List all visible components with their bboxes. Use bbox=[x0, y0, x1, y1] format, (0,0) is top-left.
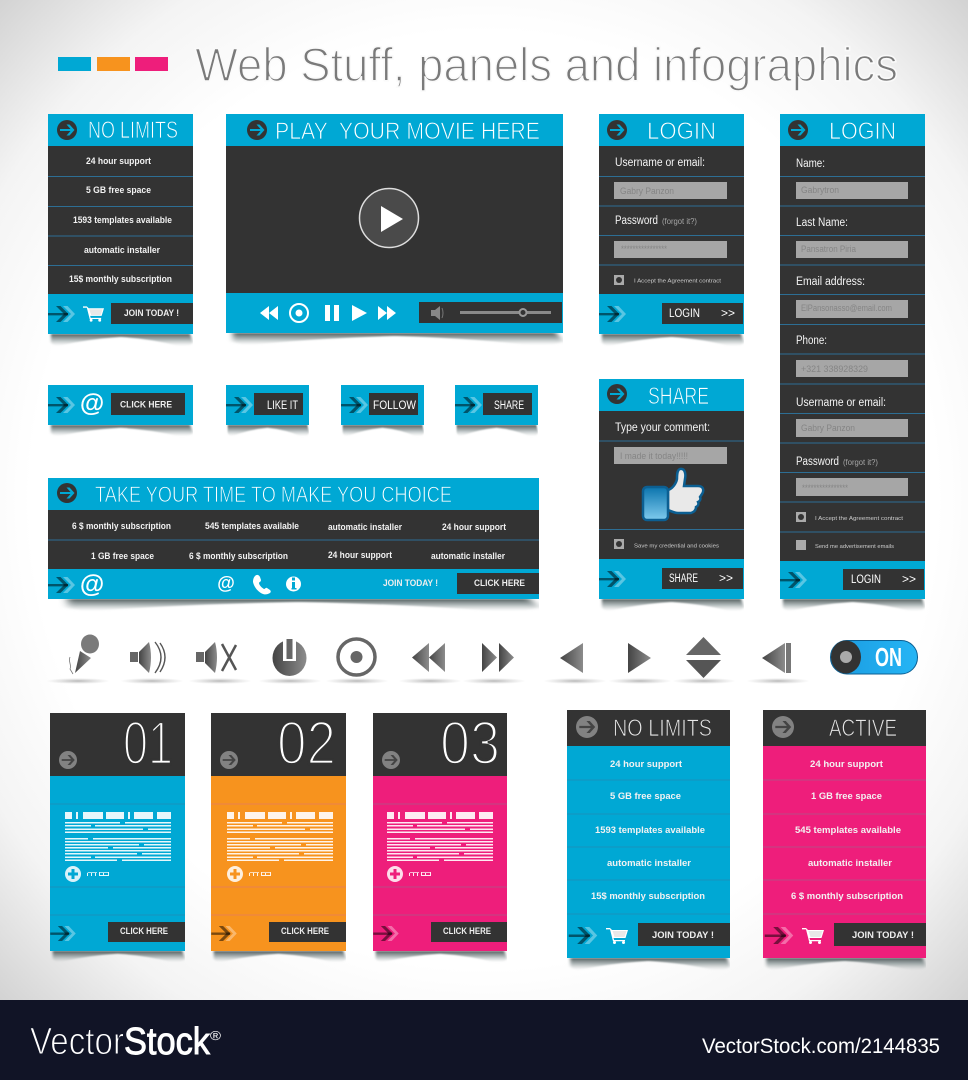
button: login: >> bbox=[902, 574, 916, 586]
placeholder copy bbox=[65, 812, 171, 882]
panel: registration bbox=[780, 114, 925, 611]
heading: TAKE YOUR TIME TO MAKE YOU CHOICE bbox=[95, 482, 452, 507]
card 03 bbox=[373, 709, 507, 962]
feature rows: automatic installer bbox=[808, 858, 893, 868]
feature rows: 6 $ monthly subscription bbox=[189, 551, 288, 561]
icon: next bbox=[628, 643, 651, 673]
form fields: Phone: bbox=[796, 335, 827, 347]
button: CLICK HERE bbox=[120, 926, 168, 936]
feature rows: 545 templates available bbox=[205, 521, 299, 531]
form fields: Username or email: bbox=[796, 397, 886, 409]
username: Username or email: bbox=[615, 157, 705, 169]
feature rows: 24 hour support bbox=[328, 550, 392, 560]
logo: Vector bbox=[30, 1021, 124, 1063]
call to action text: JOIN TODAY ! bbox=[383, 578, 438, 588]
button: login bbox=[843, 569, 924, 590]
button: CLICK HERE bbox=[443, 926, 491, 936]
icon: play button bbox=[360, 188, 418, 248]
form fields bbox=[796, 158, 908, 496]
form fields: Password bbox=[796, 456, 839, 468]
panel: active pink plan bbox=[763, 710, 926, 970]
button: join today: JOIN TODAY ! bbox=[652, 930, 714, 940]
button: join today bbox=[834, 923, 926, 946]
icon: back to start bbox=[762, 643, 791, 673]
feature rows: 15$ monthly subscription bbox=[69, 274, 172, 284]
cookies checkbox: Save my credential and cookies bbox=[634, 544, 719, 550]
agreement checkbox: I Accept the Agreement contract bbox=[634, 278, 722, 284]
button: like it bbox=[226, 385, 309, 436]
image url: VectorStock.com/2144835 bbox=[702, 1035, 940, 1058]
button: share bbox=[662, 568, 743, 589]
feature rows: 15$ monthly subscription bbox=[591, 891, 705, 901]
heading: LOGIN bbox=[829, 118, 896, 145]
icon: rewind bbox=[412, 643, 445, 672]
toggle: on bbox=[830, 640, 918, 674]
form fields: Last Name: bbox=[796, 217, 848, 229]
checkboxes: Send me advertisement emails bbox=[815, 544, 894, 550]
feature rows: 5 GB free space bbox=[610, 791, 681, 801]
button bbox=[269, 922, 346, 942]
panel: video player bbox=[226, 114, 563, 345]
form fields: Gabrytron bbox=[801, 185, 839, 195]
button: share small bbox=[455, 385, 538, 436]
form fields: Pansatron Piria bbox=[801, 244, 856, 254]
contact icons bbox=[217, 573, 301, 594]
feature rows: 1 GB free space bbox=[91, 551, 154, 561]
button: login: >> bbox=[721, 308, 735, 320]
button bbox=[431, 922, 507, 942]
feature rows: 24 hour support bbox=[610, 759, 682, 769]
button bbox=[108, 922, 185, 942]
button: join today bbox=[111, 303, 193, 324]
feature rows: 24 hour support bbox=[442, 522, 506, 532]
logo: Stock bbox=[124, 1021, 211, 1063]
colour swatches bbox=[58, 57, 168, 71]
form fields: +321 338928329 bbox=[801, 364, 868, 374]
logo bbox=[30, 1021, 221, 1063]
placeholder copy bbox=[227, 812, 333, 882]
button: click here: CLICK HERE bbox=[474, 578, 525, 588]
feature rows: 24 hour support bbox=[810, 759, 883, 769]
feature rows: automatic installer bbox=[84, 245, 160, 255]
comment field bbox=[614, 422, 727, 464]
panel: wide plan comparison bbox=[48, 478, 539, 611]
checkboxes: I Accept the Agreement contract bbox=[815, 516, 904, 522]
card 01 bbox=[50, 709, 185, 962]
toggle: on: ON bbox=[875, 642, 902, 672]
comment field: I made it today!!!!! bbox=[620, 451, 688, 461]
agreement checkbox bbox=[614, 275, 722, 285]
number: 02 bbox=[277, 709, 336, 777]
feature rows: 6 $ monthly subscription bbox=[72, 521, 171, 531]
cookies checkbox bbox=[614, 539, 719, 550]
button: login bbox=[662, 303, 743, 324]
footer band bbox=[0, 1000, 968, 1080]
icon: up and down bbox=[686, 637, 721, 678]
panel: share bbox=[599, 379, 744, 611]
button: share small: SHARE bbox=[494, 400, 524, 412]
feature rows: 24 hour support bbox=[86, 156, 151, 166]
feature rows bbox=[591, 759, 705, 901]
button: CLICK HERE bbox=[281, 926, 329, 936]
button: click here with at sign: CLICK HERE bbox=[120, 400, 172, 410]
password: (forgot it?) bbox=[662, 216, 697, 226]
volume bar bbox=[419, 302, 562, 323]
form fields: (forgot it?) bbox=[843, 457, 878, 467]
button: join today: JOIN TODAY ! bbox=[852, 930, 914, 940]
feature rows: automatic installer bbox=[431, 551, 505, 561]
player controls bbox=[260, 304, 396, 322]
feature rows bbox=[72, 521, 506, 561]
heading: NO LIMITS bbox=[613, 715, 712, 742]
username bbox=[614, 157, 727, 199]
feature rows: automatic installer bbox=[328, 522, 402, 532]
heading: SHARE bbox=[648, 383, 709, 410]
password: **************** bbox=[621, 244, 667, 254]
password bbox=[614, 215, 727, 258]
button: follow: FOLLOW bbox=[373, 400, 416, 412]
button: click here bbox=[457, 573, 539, 594]
form fields: ElPansonasso@email.com bbox=[801, 303, 892, 313]
form fields: **************** bbox=[802, 483, 848, 493]
password: Password bbox=[615, 215, 658, 227]
panel: no limits pricing bbox=[48, 114, 193, 346]
feature rows: 6 $ monthly subscription bbox=[791, 891, 903, 901]
button: share: >> bbox=[719, 573, 733, 585]
form fields: Gabry Panzon bbox=[801, 423, 855, 433]
button: join today: JOIN TODAY ! bbox=[124, 308, 179, 318]
icon: muted speaker bbox=[196, 642, 236, 673]
feature rows: automatic installer bbox=[607, 858, 692, 868]
button: follow bbox=[341, 385, 424, 436]
icon: record bbox=[338, 639, 375, 675]
button: share: SHARE bbox=[669, 573, 698, 585]
number: 03 bbox=[440, 709, 500, 777]
button: like it: LIKE IT bbox=[267, 400, 298, 412]
checkboxes bbox=[796, 512, 904, 550]
logo: ® bbox=[210, 1028, 221, 1043]
form fields: Name: bbox=[796, 158, 825, 170]
contact icons: @ bbox=[217, 573, 235, 593]
form fields: Email address: bbox=[796, 276, 865, 288]
icon: previous bbox=[560, 643, 583, 673]
feature rows bbox=[791, 759, 903, 901]
button: login: LOGIN bbox=[669, 308, 700, 320]
icon row bbox=[46, 634, 918, 684]
feature rows: 5 GB free space bbox=[86, 185, 151, 195]
icon: thumbs up bbox=[643, 469, 703, 520]
heading: NO LIMITS bbox=[88, 117, 178, 144]
username: Gabry Panzon bbox=[620, 186, 674, 196]
feature rows: 545 templates available bbox=[795, 825, 901, 835]
placeholder copy bbox=[387, 812, 493, 882]
number: 01 bbox=[123, 709, 173, 777]
title: Web Stuff, panels and infographics bbox=[195, 38, 898, 91]
icon: speaker bbox=[130, 642, 165, 673]
button: click here with at sign bbox=[48, 385, 193, 436]
button: join today bbox=[638, 923, 730, 946]
feature rows: 1593 templates available bbox=[595, 825, 705, 835]
heading: ACTIVE bbox=[829, 715, 897, 742]
feature rows bbox=[69, 156, 172, 284]
icon shadows bbox=[46, 678, 810, 684]
button: login: LOGIN bbox=[851, 574, 881, 586]
feature rows: 1 GB free space bbox=[811, 791, 882, 801]
comment field: Type your comment: bbox=[615, 422, 710, 434]
feature rows: 1593 templates available bbox=[73, 215, 172, 225]
icon: fast forward bbox=[482, 643, 514, 672]
panel: no limits blue plan bbox=[567, 710, 730, 970]
icon: power bbox=[272, 637, 306, 676]
icon: microphone bbox=[69, 634, 99, 674]
heading: LOGIN bbox=[647, 118, 716, 145]
panel: login bbox=[599, 114, 744, 346]
card 02 bbox=[211, 709, 346, 962]
heading: PLAY YOUR MOVIE HERE bbox=[275, 118, 540, 145]
